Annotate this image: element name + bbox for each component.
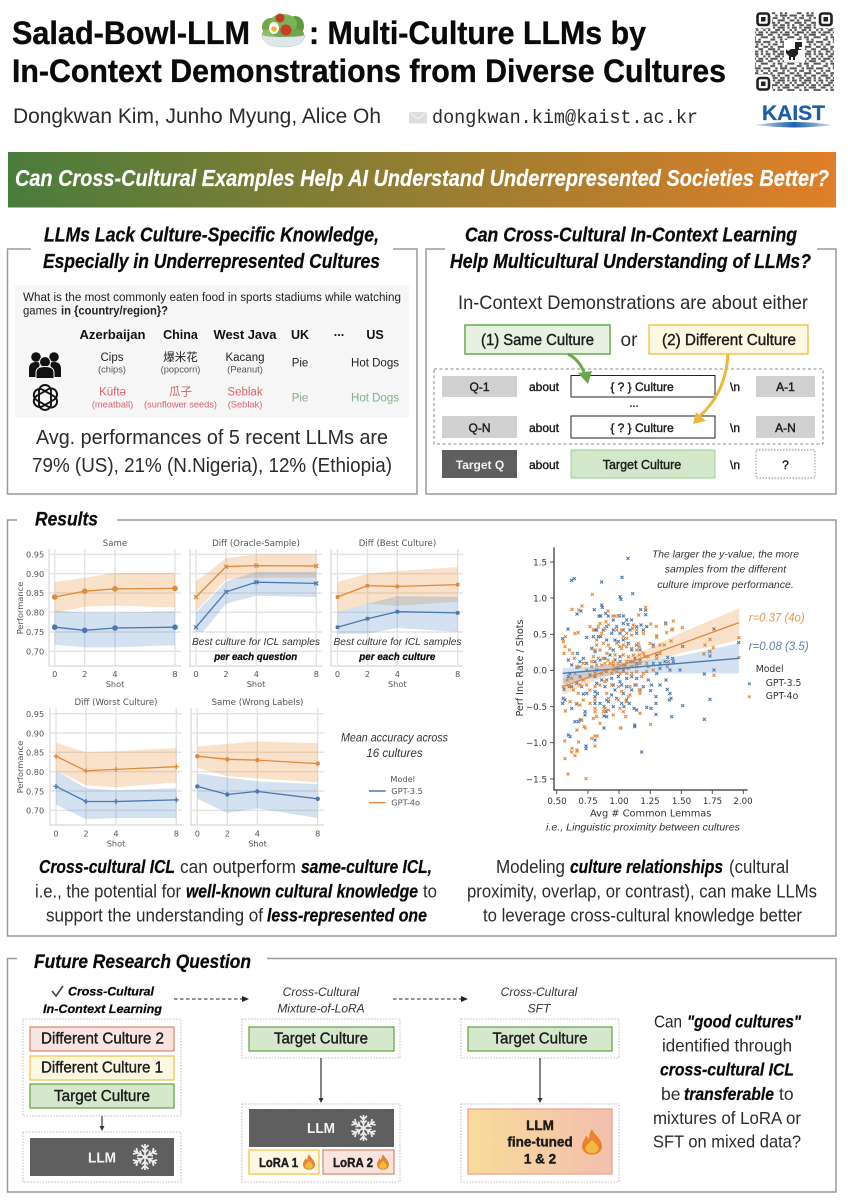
prompt template: Q-N xyxy=(468,421,490,435)
fine-tuned LLM: LLM xyxy=(526,1118,554,1133)
example table: (Peanut) xyxy=(227,364,263,374)
prompt template: ... xyxy=(629,398,639,410)
chart: Same: 0.95 xyxy=(26,550,44,560)
prompt template: about xyxy=(529,380,560,394)
scatter chart: 1.75 xyxy=(703,797,722,807)
prompt template: about xyxy=(529,421,560,435)
takeaway: right xyxy=(467,857,817,926)
example table: Pie xyxy=(292,392,308,404)
example table: ... xyxy=(334,325,344,339)
box: different culture: (2) Different Culture xyxy=(662,332,796,349)
chart: Diff (Best Culture): 4 xyxy=(395,669,400,679)
chart: Same: 0.70 xyxy=(26,646,44,656)
chart: Diff (Oracle-Sample): 0 xyxy=(193,669,199,679)
example table: China xyxy=(163,328,199,342)
prompt template: Target Q xyxy=(456,458,504,472)
prompt template xyxy=(434,369,823,478)
scatter legend: Model xyxy=(756,664,784,675)
chart: Diff (Worst Culture): Diff (Worst Culture) xyxy=(74,698,158,708)
scatter chart: Perf Inc Rate / Shots xyxy=(515,619,526,717)
chart: Same: 0 xyxy=(52,669,57,679)
scatter chart: 1.25 xyxy=(640,797,660,807)
chart: Diff (Worst Culture): Performance xyxy=(15,741,25,793)
scatter chart: −1.5 xyxy=(526,775,547,785)
LLM box: LLM xyxy=(88,1150,116,1167)
column heading: Cross-Cultural xyxy=(283,985,360,999)
column heading: Cross-Cultural xyxy=(501,985,578,999)
question text: to xyxy=(779,1084,794,1104)
takeaway: left: Cross-cultural ICL xyxy=(39,857,175,877)
chart: Same (Wrong Labels): 8 xyxy=(315,829,320,839)
annotation: y-value: samples from the different xyxy=(665,564,787,576)
QR code xyxy=(755,11,835,92)
example table: Kacang xyxy=(225,352,265,364)
chart: Same: 8 xyxy=(172,669,178,679)
takeaway: left: well-known cultural knowledge xyxy=(186,882,418,902)
example table: Hot Dogs xyxy=(351,392,399,404)
icon: envelope xyxy=(409,112,427,124)
title xyxy=(12,14,726,89)
heading: Can Cross-Cultural In-Context Learning xyxy=(465,224,797,246)
icon: people xyxy=(29,352,61,378)
note: mean accuracy: Mean accuracy across xyxy=(341,733,448,745)
takeaway: left: to xyxy=(423,882,437,902)
scatter legend xyxy=(748,664,802,702)
annotation: per each culture xyxy=(358,651,435,663)
example table: What is the most commonly eaten food in sports stadiums while watching xyxy=(23,292,401,304)
prompt template: A-1 xyxy=(776,380,795,394)
column heading: SFT xyxy=(528,1002,552,1016)
question text: identified through xyxy=(662,1036,792,1056)
column heading xyxy=(501,985,578,1016)
chart: Same: Shot xyxy=(106,679,125,689)
scatter chart: Avg # Common Lemmas xyxy=(590,809,711,820)
prompt template: A-N xyxy=(775,421,796,435)
column: ICL xyxy=(23,985,181,1182)
heading xyxy=(43,224,380,273)
column: mixture of LoRA xyxy=(242,985,400,1182)
prompt template: Target Culture xyxy=(603,458,681,472)
scatter chart: 1.0 xyxy=(533,594,547,604)
chart: Diff (Worst Culture) xyxy=(15,698,182,849)
performance text xyxy=(32,427,392,477)
target box xyxy=(468,1027,612,1051)
chart: Same (Wrong Labels): 0 xyxy=(195,829,200,839)
annotation xyxy=(192,636,321,663)
column heading: Mixture-of-LoRA xyxy=(277,1002,365,1016)
question text: transferable xyxy=(684,1084,774,1104)
scatter chart: 1.50 xyxy=(672,797,691,807)
icon: OpenAI knot xyxy=(32,385,59,410)
panel: LLMs lack knowledge xyxy=(8,224,417,494)
LoRA 2 xyxy=(323,1150,394,1174)
email: dongkwan.kim@kaist.ac.kr xyxy=(432,107,698,129)
scatter chart: 0.75 xyxy=(578,797,598,807)
chart: Same: 0.80 xyxy=(26,608,44,618)
takeaway: left: i.e., the potential for xyxy=(35,882,181,902)
note: mean accuracy xyxy=(341,733,448,760)
scatter chart: 2.00 xyxy=(733,797,753,807)
example table: West Java xyxy=(214,328,278,342)
chart: Diff (Best Culture): 8 xyxy=(455,669,460,679)
panel: future research xyxy=(8,952,836,1192)
chart: Diff (Oracle-Sample): 2 xyxy=(223,669,229,679)
chart: Same xyxy=(15,539,181,689)
takeaway: left: same-culture ICL, xyxy=(301,857,432,877)
chart: Same (Wrong Labels): Shot xyxy=(248,839,268,849)
scatter chart: −0.5 xyxy=(526,703,547,713)
takeaway: right: Modeling xyxy=(496,857,565,877)
example table: US xyxy=(366,328,384,342)
arrow xyxy=(538,1058,542,1103)
performance text: 79% (US), 21% (N.Nigeria), 12% (Ethiopia) xyxy=(32,455,392,477)
chart: Diff (Best Culture): 2 xyxy=(365,669,370,679)
heading: LLMs Lack Culture-Specific Knowledge, xyxy=(44,224,379,246)
example table: Azerbaijan xyxy=(80,328,146,342)
scatter chart: 1.00 xyxy=(609,797,629,807)
title: : Multi-Culture LLMs by xyxy=(309,15,646,51)
chart: Diff (Best Culture): 0 xyxy=(335,669,340,679)
scatter chart: 1.5 xyxy=(533,558,547,568)
chart: Diff (Oracle-Sample): Shot xyxy=(247,679,266,689)
chart: Same: Performance xyxy=(15,582,25,634)
prompt template: \n xyxy=(730,458,740,472)
prompt template: \n xyxy=(730,421,740,435)
chart: Diff (Worst Culture): 0.95 xyxy=(26,709,44,719)
scatter legend: GPT-3.5 xyxy=(766,678,802,689)
stack of demonstrations xyxy=(30,1027,174,1108)
question text: SFT on mixed data? xyxy=(653,1132,801,1152)
annotation: Best culture for ICL samples xyxy=(192,636,321,648)
takeaway: left: can outperform xyxy=(180,857,296,877)
icon: check xyxy=(52,986,63,996)
title: Salad-Bowl-LLM xyxy=(12,15,250,51)
target box xyxy=(249,1027,394,1051)
takeaway: left: less-represented one xyxy=(267,906,427,926)
LLM box xyxy=(249,1109,394,1147)
panel: results xyxy=(8,510,836,936)
arrow: dashed 2 xyxy=(393,996,468,1002)
chart: Diff (Worst Culture): 0.80 xyxy=(26,767,44,777)
chart: Diff (Worst Culture): 0.90 xyxy=(26,728,44,738)
legend xyxy=(369,774,423,808)
chart: Diff (Worst Culture): 8 xyxy=(174,829,179,839)
example table: (Seblak) xyxy=(228,400,262,410)
or: or xyxy=(621,330,638,351)
heading: Future Research Question xyxy=(34,952,251,973)
example table: Cips xyxy=(100,352,124,364)
axis note: i.e., Linguistic proximity between cultures xyxy=(546,822,741,834)
arrow: dashed 1 xyxy=(174,996,249,1002)
chart: Same (Wrong Labels): Same (Wrong Labels) xyxy=(212,698,303,708)
takeaway: left xyxy=(35,857,437,926)
arrow: green xyxy=(568,354,592,384)
chart: Diff (Best Culture): Shot xyxy=(388,679,407,689)
banner xyxy=(8,152,836,208)
chart: Diff (Oracle-Sample): Diff (Oracle-Sample) xyxy=(212,539,300,549)
legend: GPT-4o xyxy=(391,798,420,808)
chart: Same: 0.85 xyxy=(26,588,44,598)
scatter legend: GPT-4o xyxy=(766,691,799,702)
subheading: In-Context Demonstrations are about either xyxy=(458,292,808,314)
chart: Diff (Oracle-Sample): 8 xyxy=(314,669,319,679)
column: SFT xyxy=(461,985,619,1182)
takeaway: right: to leverage cross-cultural knowledge better xyxy=(483,906,802,926)
example table: UK xyxy=(291,328,309,342)
correlation labels: r=0.37 (4o) xyxy=(749,613,805,625)
column heading: Cross-Cultural xyxy=(68,985,155,999)
example table: (sunflower seeds) xyxy=(144,400,217,410)
annotation xyxy=(334,636,462,663)
chart: Diff (Worst Culture): 4 xyxy=(113,829,119,839)
takeaway: left: support the understanding of xyxy=(46,906,264,926)
example table: games xyxy=(23,306,57,318)
chart: Diff (Oracle-Sample): 4 xyxy=(254,669,259,679)
target box: Target Culture xyxy=(274,1031,368,1048)
correlation labels: r=0.08 (3.5) xyxy=(749,641,809,653)
chart: Diff (Worst Culture): 2 xyxy=(83,829,89,839)
chart: Diff (Oracle-Sample) xyxy=(190,539,322,689)
takeaway: right: proximity, overlap, or contrast), can make LLMs xyxy=(467,882,817,902)
heading: Results xyxy=(35,510,98,530)
LoRA 1 xyxy=(249,1150,319,1174)
title: In-Context Demonstrations from Diverse Cultures xyxy=(12,53,726,89)
fine-tuned LLM: 1 & 2 xyxy=(524,1152,556,1167)
chart: Same (Wrong Labels) xyxy=(191,698,324,849)
prompt template: { ? } Culture xyxy=(610,380,674,394)
target box: Target Culture xyxy=(492,1031,588,1048)
chart: Diff (Worst Culture): 0.75 xyxy=(26,786,44,796)
example table: Pie xyxy=(292,358,308,370)
column heading xyxy=(277,985,365,1016)
example table xyxy=(15,285,409,418)
chart: Same: 2 xyxy=(82,669,87,679)
example table: 瓜子 xyxy=(169,386,192,398)
prompt template: Q-1 xyxy=(469,380,490,394)
example table: 爆米花 xyxy=(163,350,198,364)
chart: Diff (Best Culture): Diff (Best Culture) xyxy=(359,539,436,549)
question text: be xyxy=(661,1084,680,1104)
prompt template: \n xyxy=(730,380,740,394)
example table: (popcorn) xyxy=(161,364,200,374)
authors: Dongkwan Kim, Junho Myung, Alice Oh xyxy=(13,105,381,128)
arrow xyxy=(318,1058,324,1103)
scatter chart: −1.0 xyxy=(526,739,547,749)
prompt template: about xyxy=(529,458,560,472)
fine-tuned LLM: fine-tuned xyxy=(507,1135,573,1150)
stack of demonstrations: Different Culture 1 xyxy=(41,1060,163,1077)
chart: Same: 4 xyxy=(112,669,118,679)
example table: Küftə xyxy=(99,386,126,398)
stack of demonstrations: Different Culture 2 xyxy=(41,1031,164,1048)
icon: salad bowl xyxy=(262,14,305,47)
heading: Help Multicultural Understanding of LLMs? xyxy=(450,251,811,273)
example table: Hot Dogs xyxy=(351,358,399,370)
chart: Same (Wrong Labels): 2 xyxy=(225,829,230,839)
chart: Diff (Worst Culture): 0.85 xyxy=(26,748,44,758)
question text: "good cultures" xyxy=(687,1012,802,1032)
scatter chart: 0.0 xyxy=(533,667,547,677)
chart: Same: Same xyxy=(103,539,127,549)
stack of demonstrations: Target Culture xyxy=(54,1088,150,1105)
panel: cross-cultural ICL xyxy=(426,224,836,494)
annotation: y-value: The larger the y-value, the more xyxy=(652,549,799,561)
scatter chart: 0.50 xyxy=(547,797,567,807)
column heading xyxy=(43,985,163,1016)
example table: in {country/region}? xyxy=(61,306,168,318)
chart: Diff (Worst Culture): 0 xyxy=(53,829,59,839)
heading: Especially in Underrepresented Cultures xyxy=(43,251,380,273)
chart: Same: 0.75 xyxy=(26,627,44,637)
prompt template: { ? } Culture xyxy=(610,421,674,435)
LoRA 2: LoRA 2 xyxy=(333,1156,373,1170)
question text xyxy=(653,1012,802,1152)
note: mean accuracy: 16 cultures xyxy=(366,748,423,760)
arrow xyxy=(100,1116,104,1131)
chart: Diff (Worst Culture): 0.70 xyxy=(26,806,44,816)
heading xyxy=(450,224,811,273)
example table: (meatball) xyxy=(92,400,133,410)
LLM box xyxy=(30,1138,174,1176)
legend: Model xyxy=(390,774,415,784)
LLM box: LLM xyxy=(307,1120,335,1137)
annotation: Best culture for ICL samples xyxy=(334,636,462,648)
chart: Same (Wrong Labels): 4 xyxy=(255,829,260,839)
box: different culture xyxy=(649,325,808,354)
box: same culture xyxy=(465,325,610,354)
icon: dinosaur xyxy=(786,42,802,60)
question text: mixtures of LoRA or xyxy=(653,1108,801,1128)
example table: Seblak xyxy=(227,386,263,398)
performance text: Avg. performances of 5 recent LLMs are xyxy=(36,427,388,449)
correlation labels xyxy=(749,613,809,653)
fine-tuned LLM xyxy=(468,1109,612,1174)
LoRA 1: LoRA 1 xyxy=(259,1156,298,1170)
annotation: per each question xyxy=(213,651,297,663)
box: same culture: (1) Same Culture xyxy=(481,332,594,349)
takeaway: right: (cultural xyxy=(729,857,789,877)
chart: Same: 0.90 xyxy=(26,569,44,579)
scatter chart xyxy=(515,547,809,834)
annotation: y-value xyxy=(652,549,799,591)
prompt template: ? xyxy=(782,458,789,472)
KAIST logo: KAIST xyxy=(762,101,825,125)
chart: Diff (Best Culture) xyxy=(331,539,463,689)
column heading: In-Context Learning xyxy=(43,1002,163,1016)
example table: (chips) xyxy=(98,364,126,374)
legend: GPT-3.5 xyxy=(391,786,423,796)
question text: cross-cultural ICL xyxy=(660,1060,794,1080)
arrow: yellow xyxy=(693,354,728,424)
annotation: y-value: culture improve performance. xyxy=(657,579,794,591)
question text: Can xyxy=(654,1012,682,1032)
scatter chart: 0.5 xyxy=(533,631,547,641)
takeaway: right: culture relationships xyxy=(570,857,723,877)
chart: Diff (Worst Culture): Shot xyxy=(107,839,126,849)
